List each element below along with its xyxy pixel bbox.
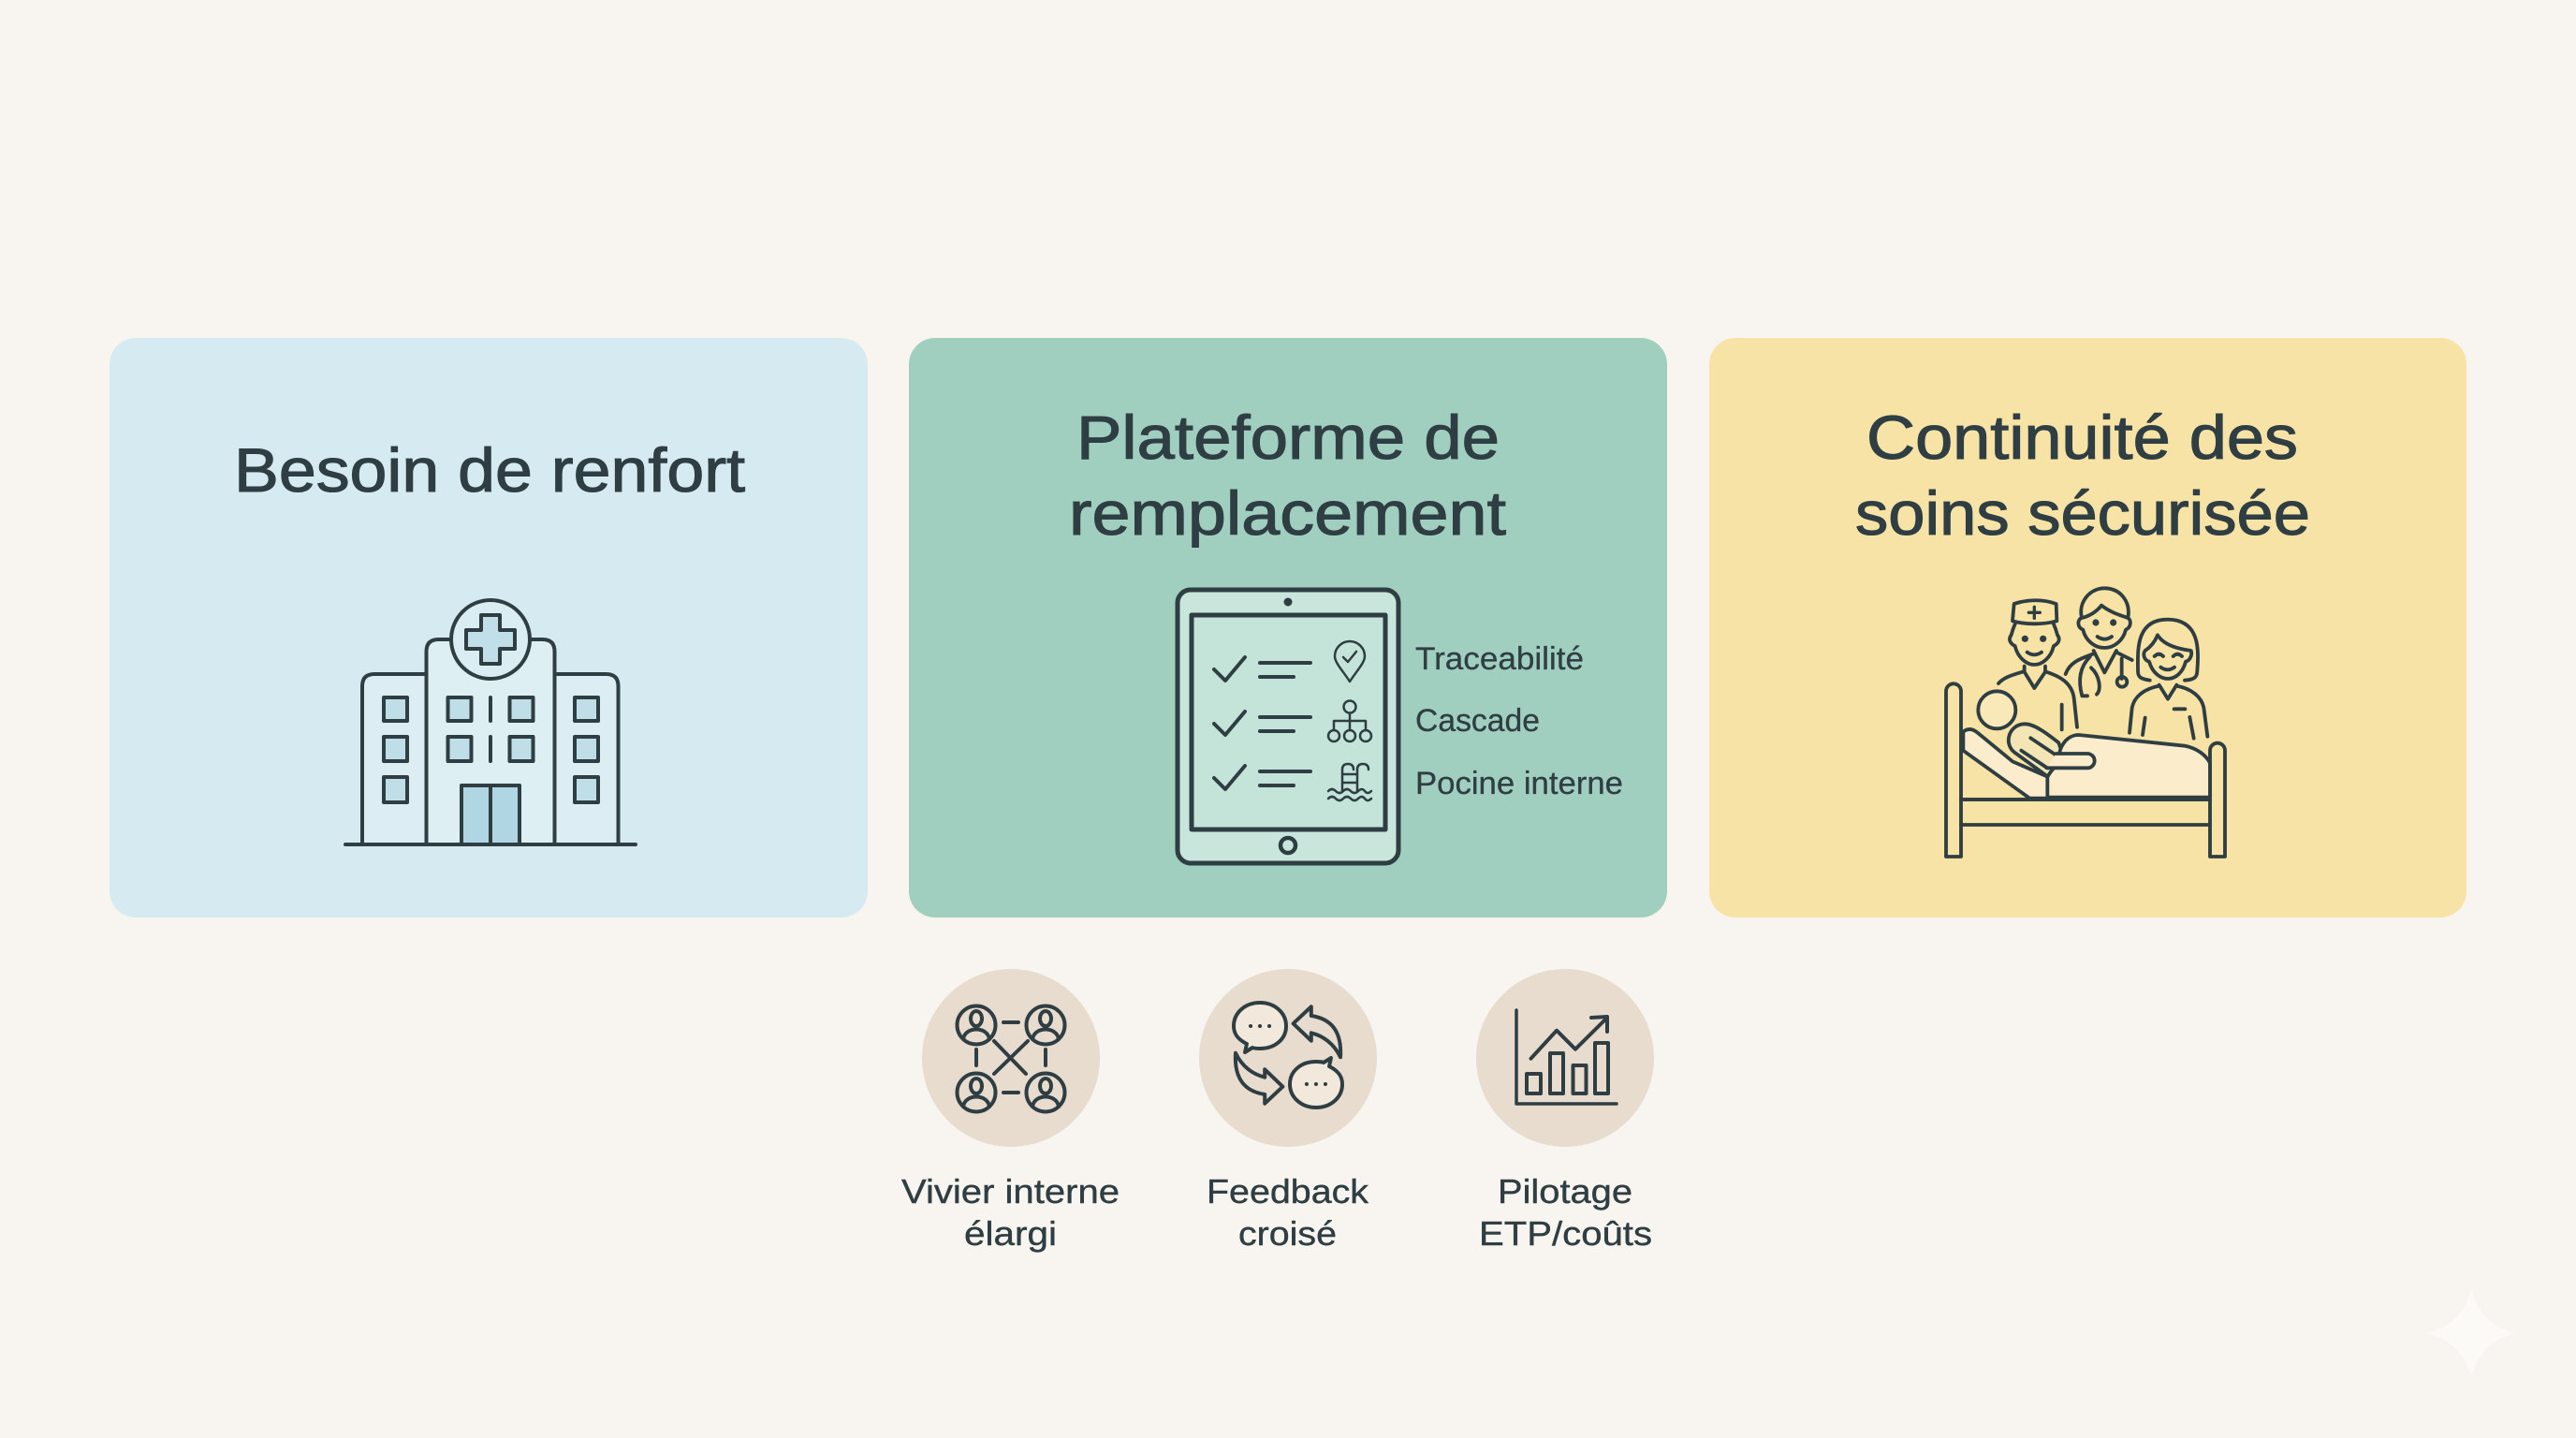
nurse with long hair bbox=[2130, 620, 2207, 739]
heading: continuite des soins securisee: soins sécurisée bbox=[1855, 478, 2310, 548]
heading: plateforme de remplacement bbox=[1069, 403, 1506, 548]
icon: sparkle watermark bbox=[2426, 1288, 2516, 1378]
card background teal bbox=[909, 338, 1667, 917]
label: traceabilite: Traceabilité bbox=[1415, 641, 1584, 677]
panel: continuite des soins bbox=[1709, 338, 2466, 917]
bed frame bbox=[1946, 683, 2225, 857]
icon: hierarchy bbox=[1328, 700, 1371, 741]
nurse bbox=[1998, 600, 2077, 729]
icon: swimming pool bbox=[1328, 764, 1371, 800]
icon circle bbox=[1199, 969, 1377, 1147]
caption bbox=[901, 1172, 1120, 1253]
caption: croisé bbox=[1238, 1214, 1337, 1253]
caption: Vivier interne bbox=[901, 1172, 1120, 1211]
icon: hospital bbox=[345, 600, 636, 844]
feature: feedback croise bbox=[1199, 969, 1377, 1253]
patient head bbox=[1978, 691, 2015, 728]
panel: plateforme de remplacement bbox=[909, 338, 1667, 917]
icon: network of people bbox=[957, 1005, 1065, 1112]
caption bbox=[1479, 1172, 1652, 1253]
caption: ETP/coûts bbox=[1479, 1214, 1652, 1253]
card background blue bbox=[110, 338, 868, 917]
heading: continuite des soins securisee: Continuité des bbox=[1866, 403, 2298, 472]
icon: rising bar chart bbox=[1516, 1010, 1617, 1104]
caption: Pilotage bbox=[1498, 1172, 1632, 1211]
card background yellow bbox=[1709, 338, 2466, 917]
icon circle bbox=[922, 969, 1100, 1147]
pillow bbox=[1963, 729, 2048, 799]
heading: continuite des soins securisee bbox=[1855, 403, 2310, 548]
label: cascade: Cascade bbox=[1415, 703, 1540, 739]
icon circle bbox=[1476, 969, 1654, 1147]
icon: tablet checklist bbox=[1178, 590, 1398, 863]
caption: élargi bbox=[964, 1214, 1057, 1253]
caption: Feedback bbox=[1207, 1172, 1369, 1211]
icon: care team around patient bed bbox=[1946, 588, 2225, 857]
icon: speech bubbles and arrows bbox=[1234, 1003, 1342, 1108]
heading: plateforme de remplacement: Plateforme de bbox=[1076, 403, 1500, 472]
heading: besoin de renfort: Besoin de renfort bbox=[234, 435, 745, 505]
heading: plateforme de remplacement: remplacement bbox=[1069, 478, 1506, 548]
blanket bbox=[2047, 735, 2210, 798]
doctor bbox=[2066, 588, 2132, 696]
feature: pilotage etp couts bbox=[1476, 969, 1654, 1253]
patient body bbox=[2009, 724, 2065, 777]
icon: location pin bbox=[1335, 641, 1365, 682]
panel: besoin de renfort bbox=[110, 338, 868, 917]
feature: vivier interne elargi bbox=[901, 969, 1120, 1253]
label: pocine interne: Pocine interne bbox=[1415, 766, 1623, 801]
patient arm bbox=[2047, 754, 2095, 768]
caption bbox=[1207, 1172, 1369, 1253]
